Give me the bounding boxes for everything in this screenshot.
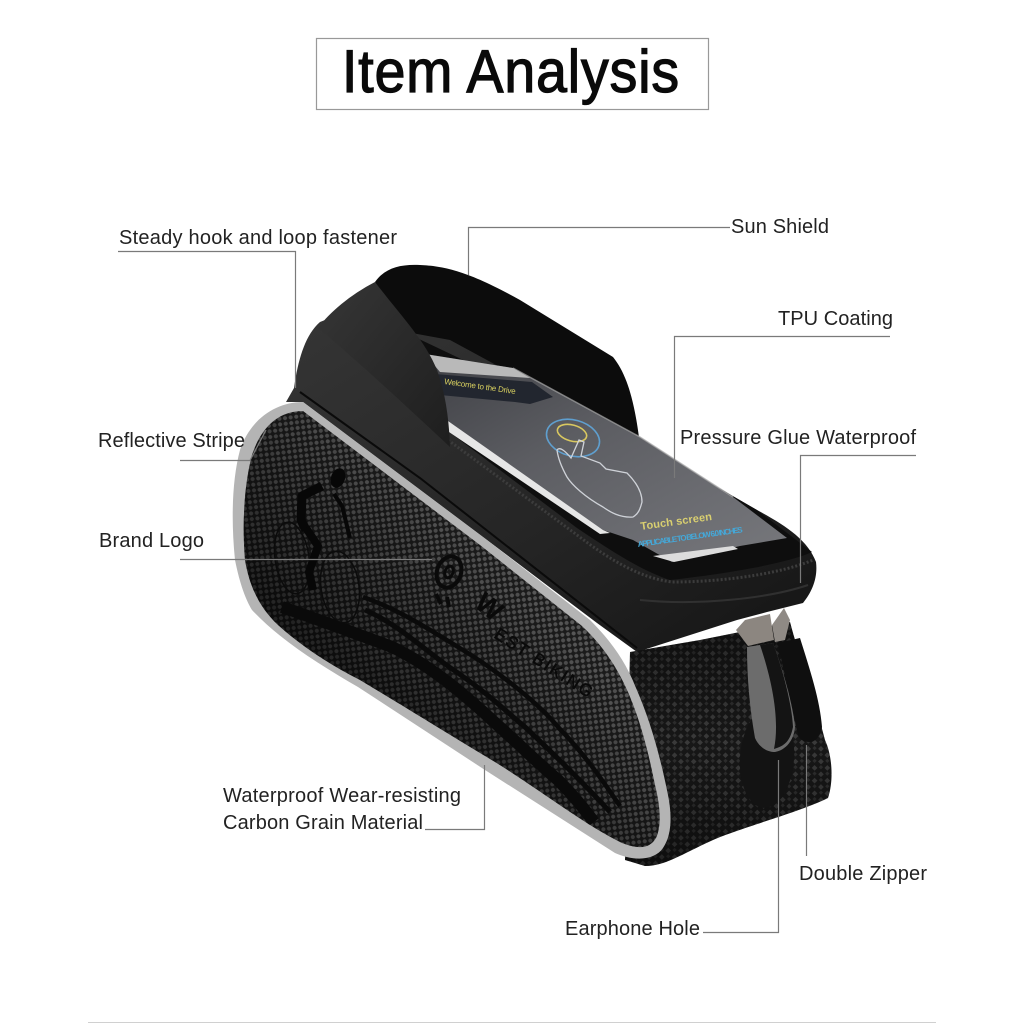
label: carbon grain material — [223, 785, 461, 834]
brand name — [469, 586, 596, 701]
end panel — [625, 622, 832, 866]
label: sun shield: Sun Shield — [731, 216, 829, 238]
side panel reflective edge — [233, 402, 671, 859]
label: brand logo: Brand Logo — [99, 530, 204, 552]
product: bike frame bag — [233, 265, 832, 866]
leader lines — [118, 228, 916, 932]
earphone hole — [737, 706, 797, 810]
white glass reflection — [446, 421, 610, 534]
brand name: EST BIKING — [491, 624, 596, 701]
label: pressure glue waterproof: Pressure Glue Waterproof — [680, 427, 916, 449]
sun shield back — [375, 265, 640, 445]
dark screen frame — [400, 330, 812, 580]
zipper sliders — [736, 614, 774, 646]
seam lines — [300, 392, 637, 648]
label: carbon grain material: Carbon Grain Material — [223, 812, 423, 834]
black swoosh stripes — [282, 597, 620, 822]
end panel shading — [625, 622, 832, 866]
cyclist logo — [270, 466, 364, 625]
label: double zipper: Double Zipper — [799, 863, 927, 885]
label: carbon grain material: Waterproof Wear-resisting — [223, 785, 461, 807]
sun shield front flap — [318, 282, 450, 447]
upper leather body — [286, 318, 816, 652]
phone top bar — [425, 354, 530, 378]
zipper pull back — [778, 638, 822, 742]
title box — [316, 38, 708, 110]
label: earphone hole: Earphone Hole — [565, 918, 700, 940]
zipper pull front — [747, 643, 795, 752]
brand name: W — [469, 586, 510, 627]
banner text: Welcome to the Drive — [444, 377, 517, 396]
hand icon — [542, 414, 642, 517]
side panel dot texture — [244, 411, 660, 847]
title: Item Analysis — [342, 38, 680, 105]
label: steady hook and loop fastener: Steady hook and loop fastener — [119, 227, 397, 249]
phone window — [425, 354, 787, 562]
side panel shading — [244, 411, 660, 847]
touch label: Touch screen — [640, 511, 713, 533]
stitched seam — [448, 440, 813, 582]
label: reflective stripe: Reflective Stripe — [98, 430, 245, 452]
label: TPU coating: TPU Coating — [778, 308, 893, 330]
infographic — [88, 38, 936, 1023]
screen blue text: APPLICABLE TO BELOW 6.0 INCHES — [637, 525, 744, 549]
brand emblem — [432, 553, 466, 607]
screen banner — [435, 374, 553, 404]
